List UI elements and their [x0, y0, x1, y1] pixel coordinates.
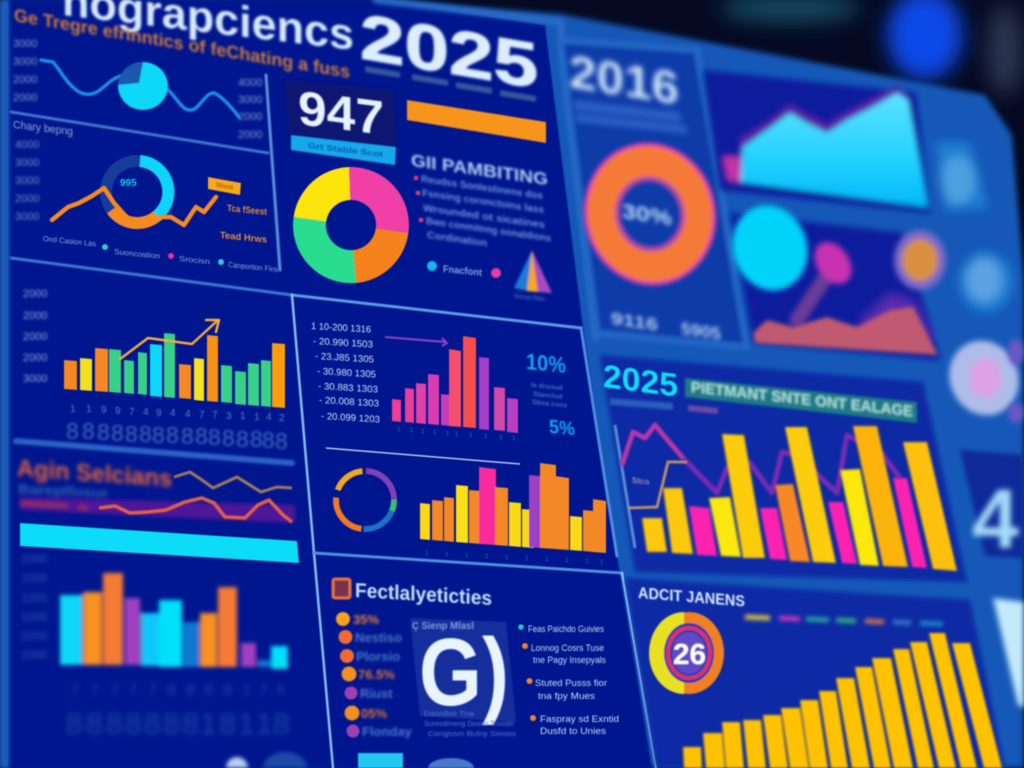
cyan bar — [20, 523, 299, 563]
dial 26: 26 — [673, 639, 706, 671]
legend: Suoncostion — [114, 247, 160, 261]
tick digits: 1199749447731142 — [70, 404, 285, 424]
card footer: Congtovo Bulny Sieoos — [428, 729, 516, 738]
heading: ADCIT JANENS — [638, 584, 745, 611]
bars — [420, 463, 606, 553]
card caption: Ç Sienp Mlasl — [412, 621, 474, 632]
axis labels: 4000 — [15, 139, 39, 151]
number list: - 30.980 1305 — [317, 366, 376, 381]
donut value: 995 — [120, 178, 137, 189]
right list: tne Pagy Insepyals — [533, 655, 606, 665]
bars — [60, 573, 288, 669]
stat list labels: 76.5% — [358, 667, 395, 682]
stat list labels: Plorsio — [356, 649, 400, 664]
number list: - 20.099 1203 — [321, 411, 380, 426]
legend: Srocisn — [179, 254, 210, 266]
number list: - 30.883 1303 — [318, 381, 378, 396]
axis line — [615, 425, 635, 548]
body lines — [421, 174, 551, 249]
legend dashes — [745, 617, 943, 624]
right list: Feas Paichdo Guivies — [528, 624, 604, 634]
stat 10%: 10% — [526, 349, 566, 378]
donut — [568, 127, 732, 301]
donut — [106, 161, 169, 223]
axis labels left: 3000 — [13, 38, 37, 50]
bars — [642, 426, 957, 571]
tick blocks: 8888888888888888 — [66, 418, 288, 454]
magenta line start — [622, 425, 683, 465]
stat list labels: Flonday — [362, 724, 413, 739]
axis labels left: 3000 — [13, 56, 37, 68]
orange circle — [894, 230, 946, 290]
axis labels right: 3000 — [238, 94, 262, 106]
panel: mid top list and bars — [311, 321, 575, 442]
thin rule — [326, 448, 520, 464]
callouts: Tead Hrws — [220, 230, 267, 246]
footer figures: 9116 — [611, 309, 658, 335]
axis labels: 3000 — [23, 373, 47, 385]
axis labels: 1000 — [21, 571, 48, 585]
stat caption: Sboa cons — [532, 399, 567, 410]
stat value: 947 — [298, 81, 384, 146]
stat list labels: Riust — [360, 686, 393, 701]
axis labels: 3000 — [15, 211, 39, 223]
stat list dots — [336, 612, 360, 738]
stat caption bar: Grt Stable Scot — [308, 141, 383, 159]
panel: key figure 947 — [285, 80, 396, 165]
donut value: 30% — [622, 200, 672, 231]
body lines: Fsnsing coronctoins lass — [422, 188, 544, 216]
panel body — [625, 578, 1005, 768]
body lines: Cordination — [427, 230, 487, 249]
number list: - 20.008 1303 — [319, 395, 379, 410]
axis labels — [23, 288, 47, 385]
cropped dial shape — [263, 752, 307, 768]
stat list labels — [353, 612, 413, 739]
divider lines — [11, 0, 656, 768]
G logo: G) — [419, 619, 509, 726]
purple line — [622, 425, 900, 493]
heading: Agin Selcians — [17, 455, 172, 493]
panel: 2016 donut — [560, 40, 747, 347]
axis labels: 1000 — [21, 610, 48, 624]
orange header bar — [407, 100, 546, 143]
panel body — [600, 355, 967, 582]
panel body — [560, 40, 747, 347]
orange line — [52, 188, 216, 225]
blue dome — [428, 758, 474, 768]
card footer: Sunrodmeng Dosrin Trosstn — [424, 719, 514, 728]
axis labels: 3000 — [15, 175, 39, 187]
right list: Stuted Pusss fior — [535, 678, 607, 688]
panel: blurred shapes chart — [722, 196, 946, 360]
tick blocks: 888888818118 — [66, 708, 290, 741]
thumbnail one — [935, 142, 988, 210]
purple band — [20, 497, 295, 523]
rising bars — [683, 633, 1002, 768]
tan line — [628, 462, 687, 508]
axis labels: 2000 — [23, 352, 47, 364]
panel: Fectlalyeticties — [333, 579, 619, 768]
year: 2025 — [603, 358, 678, 404]
axis labels: 2000 — [23, 331, 47, 343]
card footer — [424, 709, 516, 738]
stat caption: Ie druoud — [531, 382, 563, 392]
purple arrow — [385, 337, 447, 346]
axis labels left — [13, 38, 37, 104]
axis labels: 2000 — [23, 288, 47, 300]
axis labels — [21, 552, 48, 662]
stat caption: Stanclod — [533, 391, 562, 401]
body lines: Reudss Sonlestinens dos — [421, 174, 543, 202]
card footer: Dasnllvo Tna — [424, 709, 475, 718]
panel: left bar chart — [23, 288, 288, 454]
legend: Fnacfont — [443, 264, 483, 279]
ticks: 1111111111 — [397, 427, 516, 442]
title year 2025: 2025 — [360, 0, 538, 102]
axis labels: 2000 — [15, 193, 39, 205]
axis labels — [15, 139, 39, 223]
wave line — [41, 60, 239, 117]
axis labels: 1000 — [21, 591, 48, 605]
axis labels left: 2000 — [13, 92, 37, 104]
stat 5%: 5% — [549, 417, 575, 441]
callouts: Tca fSeest — [227, 203, 268, 218]
pie — [118, 62, 168, 110]
magenta blob — [807, 235, 859, 291]
axis labels left: 2000 — [13, 74, 37, 86]
panel: 2025 bars — [600, 355, 967, 582]
subtitle: Ge Tregre efrinntics of feChating a fuss — [14, 5, 350, 82]
dark thumbnail — [960, 450, 1024, 558]
pink circle — [937, 329, 1024, 427]
label box: Woot — [216, 182, 234, 192]
big blurred numeral: 4 — [972, 472, 1019, 566]
panel: right column thumbnails — [935, 142, 1024, 708]
body lines: Wrounded ot sicatines — [423, 203, 545, 231]
panel: ADCIT JANENS — [625, 578, 1005, 768]
panel: wave line and pie — [13, 38, 262, 141]
panel: mid ring and bars — [326, 448, 606, 566]
panel: cyan area chart — [703, 70, 930, 213]
panel: Agin Selcians — [17, 455, 299, 563]
right list: Dusfd to Unies — [540, 726, 607, 736]
footer figures — [611, 309, 722, 344]
left edge strip — [0, 0, 9, 768]
body lines: Bwo conmitnng oonaldions — [426, 216, 551, 245]
axis labels right: 2000 — [238, 111, 262, 123]
year: 2016 — [569, 45, 679, 115]
number list: - 20.990 1503 — [313, 336, 373, 351]
sub bar — [610, 398, 673, 410]
cyan tile — [358, 753, 403, 768]
cropped cloud shape — [226, 757, 248, 768]
purple fragments — [1008, 339, 1024, 423]
chart heading: Chary bepng — [13, 119, 73, 138]
axis labels: 1000 — [21, 552, 48, 566]
bars — [392, 336, 518, 433]
number list: - 23.J85 1305 — [315, 351, 374, 366]
G image card — [410, 618, 516, 738]
axis labels: 1000 — [21, 629, 48, 643]
axis labels: 2000 — [23, 310, 47, 322]
legend — [43, 234, 278, 274]
panel body — [730, 213, 940, 360]
triangle mini chart — [514, 250, 552, 293]
ring chart — [336, 471, 394, 529]
legend: Canportion Fins — [228, 260, 278, 274]
muted line — [174, 472, 292, 492]
red dashes — [20, 503, 88, 508]
red area — [753, 307, 938, 355]
sub heading: Bareplfosur — [18, 481, 108, 503]
heading icon — [333, 579, 350, 598]
bars — [64, 333, 285, 408]
panel: donut and line chart — [13, 119, 278, 274]
text block: parameters — [411, 150, 552, 303]
small pink tag — [688, 405, 718, 414]
donut chart: four segments — [293, 167, 409, 283]
pin stem — [797, 275, 827, 320]
bullet dots — [414, 176, 424, 222]
callouts — [220, 203, 268, 246]
light thumbnail — [993, 598, 1024, 708]
right list: tna fpy Mues — [538, 691, 596, 701]
navy main board — [8, 0, 652, 768]
heading: GII PAMBITING — [411, 150, 548, 189]
green banner: PIETMANT SNTE ONT EALAGE — [691, 379, 913, 420]
small caption: Sonse Rels — [514, 294, 545, 303]
right list: Faspray sd Exntid — [540, 714, 619, 724]
sub bars — [573, 100, 688, 134]
axis labels: 1000 — [21, 648, 48, 662]
dial 26 — [649, 612, 724, 694]
panel: lower left bars — [21, 552, 307, 768]
legend: Ond Casion Las — [43, 234, 96, 248]
number list: 1 10-200 1316 — [311, 321, 371, 336]
heading: Fectlalyeticties — [355, 580, 492, 610]
number list — [311, 321, 380, 426]
red line — [99, 498, 292, 522]
ticks: 1111111111 — [425, 551, 604, 566]
thumbnail two — [959, 252, 1013, 312]
right list — [518, 624, 619, 736]
stat list labels: 05% — [361, 706, 387, 721]
axis labels right: 4000 — [238, 77, 262, 89]
axis labels: 3000 — [15, 157, 39, 169]
axis labels right — [238, 77, 262, 141]
axis caption: Stco — [632, 476, 649, 487]
label box — [208, 177, 241, 195]
tick digits: 777778888174 — [70, 682, 285, 699]
purple area — [860, 292, 935, 340]
axis labels right: 2000 — [238, 129, 262, 141]
footer figures: 5905 — [681, 319, 722, 344]
trend arrow — [120, 320, 219, 359]
stat caption — [531, 382, 567, 410]
cyan circle — [722, 196, 818, 300]
stat box — [285, 80, 396, 148]
stat list labels: Nestiso — [355, 630, 402, 645]
legend — [427, 261, 501, 279]
stat list labels: 35% — [353, 612, 379, 627]
right list: Lonnog Cosrs Tuse — [531, 643, 604, 653]
